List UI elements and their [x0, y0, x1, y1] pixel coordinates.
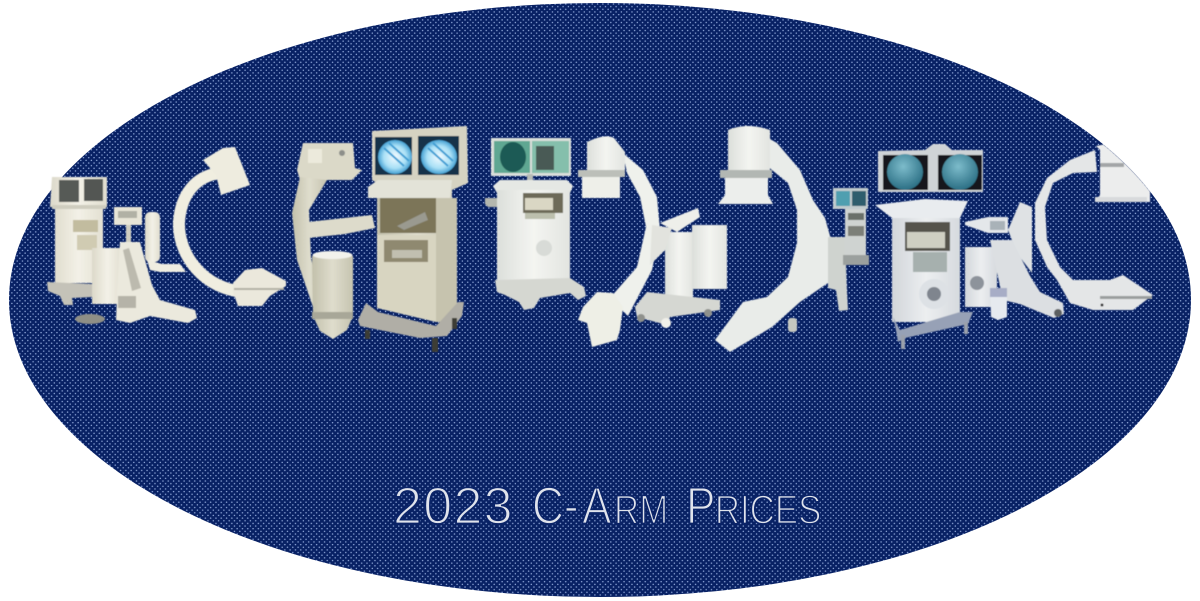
detector bottom 3 — [578, 292, 623, 347]
stand 4 — [828, 237, 848, 311]
C-arm machine 4 — [715, 125, 869, 352]
monitor cart 5 — [875, 144, 983, 349]
detector bottom 1 — [233, 268, 286, 306]
C arc 2 — [292, 177, 327, 307]
mobile stand 3 — [635, 208, 727, 328]
monitor cart 3 — [485, 138, 586, 310]
support arm 2 — [308, 215, 375, 238]
detector top 3 — [578, 136, 625, 198]
title: A — [582, 477, 612, 535]
C-arm machine 2 — [292, 126, 468, 352]
monitor cart 2 — [358, 126, 468, 352]
image intensifier cylinder 2 — [312, 251, 353, 339]
C-arm machine 3 — [485, 136, 727, 347]
detector cylinder 4 — [718, 126, 773, 204]
title: P — [686, 477, 715, 535]
title: 2023 — [393, 478, 514, 536]
C-arm machine 5 — [875, 142, 1153, 349]
title: RM — [614, 488, 678, 533]
title: RICES — [715, 488, 821, 533]
C arc 1 — [179, 173, 236, 291]
wheel 4 — [788, 318, 797, 332]
mobile stand 5 — [965, 202, 1064, 320]
detector top 5 — [1095, 142, 1150, 202]
mobile stand 1 — [75, 207, 197, 324]
C arc 3 — [610, 153, 660, 316]
C arc 4 — [715, 125, 832, 352]
C-arm machine 1 — [47, 147, 286, 324]
rear cart 4 — [833, 188, 869, 265]
C arc and bottom detector 5 — [1035, 150, 1153, 310]
detector head 2 — [297, 143, 362, 180]
title: C- — [532, 477, 579, 535]
detector top 1 — [203, 147, 250, 195]
monitor cart 1 — [47, 177, 107, 305]
title — [393, 477, 821, 536]
